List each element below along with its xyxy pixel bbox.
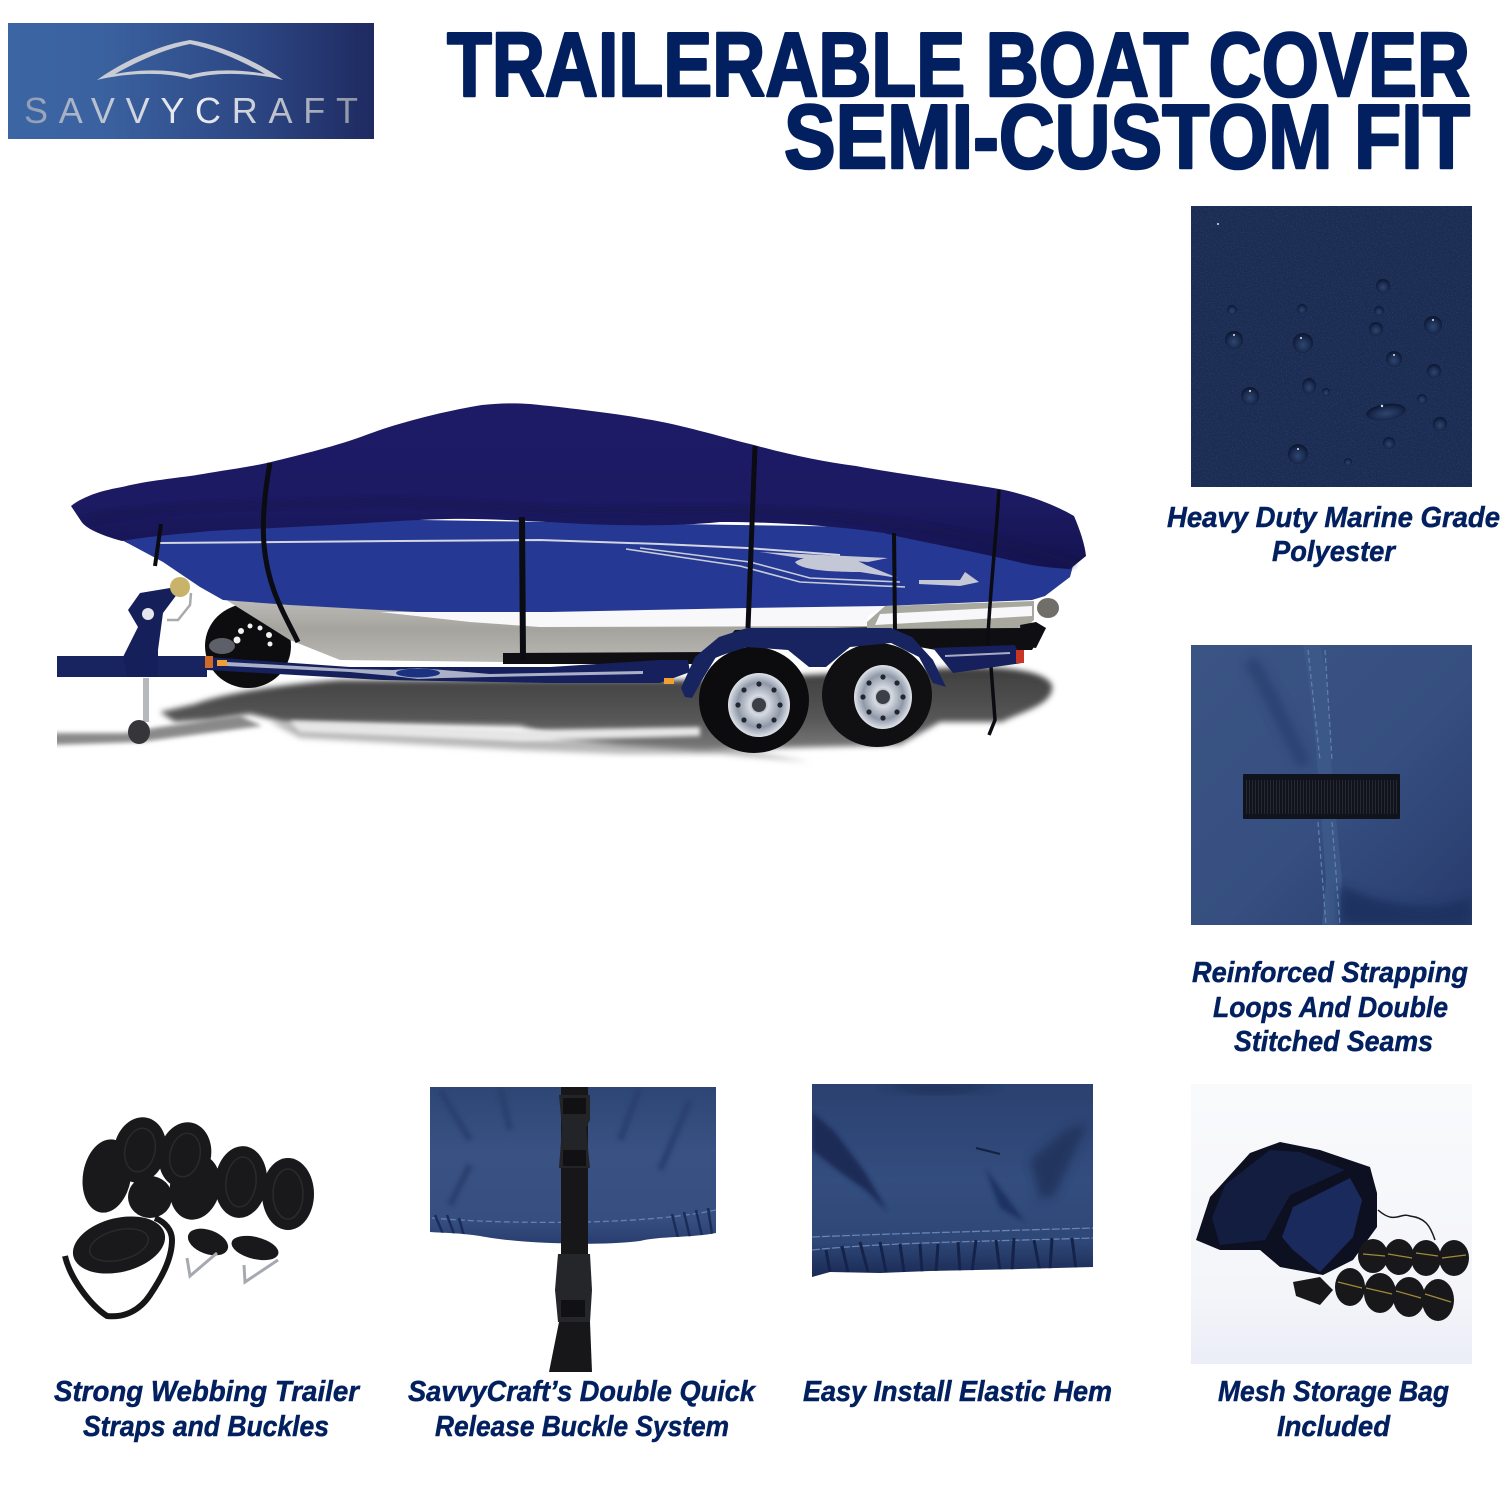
caption: strapping loops: Stitched Seams xyxy=(1234,1026,1433,1058)
cover straps xyxy=(155,446,999,735)
caption: webbing straps: Straps and Buckles xyxy=(83,1411,329,1443)
caption: buckle system xyxy=(408,1376,757,1443)
hull graphic swoosh xyxy=(160,540,979,587)
caption: elastic hem: Easy Install Elastic Hem xyxy=(803,1376,1112,1408)
swatch: reinforced strapping loop xyxy=(1191,645,1472,925)
cover fold shadow xyxy=(90,502,1075,565)
boat cover xyxy=(71,403,1086,569)
caption: buckle system: Release Buckle System xyxy=(435,1411,729,1443)
logo: SavvyCraft: SAVVYCRAFT xyxy=(24,90,358,131)
white stripe xyxy=(380,606,885,627)
mesh bag xyxy=(1196,1142,1377,1275)
swatch: marine grade polyester with water drops xyxy=(1191,206,1472,487)
buckle strap xyxy=(549,1087,592,1372)
photo: mesh storage bag xyxy=(1191,1084,1472,1364)
stuffed cover xyxy=(1282,1178,1362,1272)
caption: strapping loops: Loops And Double xyxy=(1213,992,1448,1024)
photo: webbing straps and buckles xyxy=(65,1112,314,1316)
bundled straps xyxy=(1293,1239,1469,1321)
strapping loop xyxy=(1243,774,1400,819)
caption: webbing straps xyxy=(54,1376,361,1443)
outboard motor xyxy=(1020,598,1059,648)
boat on trailer with cover xyxy=(50,403,1086,762)
caption: mesh storage bag xyxy=(1218,1376,1449,1443)
grey rear band xyxy=(867,601,1034,629)
photo: double quick release buckle xyxy=(430,1087,716,1372)
photo: elastic hem xyxy=(812,1084,1093,1277)
ground shadow xyxy=(50,667,1052,762)
trailer wheels xyxy=(822,643,932,747)
caption: marine grade polyester: Polyester xyxy=(1272,536,1397,568)
fender xyxy=(681,628,946,698)
caption: strapping loops xyxy=(1192,957,1468,1058)
blue hull xyxy=(100,515,1074,612)
jack and caster xyxy=(128,678,150,744)
caption: mesh storage bag: Included xyxy=(1277,1411,1391,1443)
lower hull grey xyxy=(223,598,880,662)
caption: marine grade polyester xyxy=(1167,502,1500,568)
hull under-rear dark xyxy=(503,624,1046,664)
caption: mesh storage bag: Mesh Storage Bag xyxy=(1218,1376,1449,1408)
title xyxy=(447,15,1470,188)
trailer frame xyxy=(205,656,690,684)
caption: buckle system: SavvyCraft’s Double Quick xyxy=(408,1376,757,1408)
caption: webbing straps: Strong Webbing Trailer xyxy=(54,1376,361,1408)
caption: strapping loops: Reinforced Strapping xyxy=(1192,957,1468,989)
trailer tongue xyxy=(57,656,207,677)
cord xyxy=(1378,1210,1435,1240)
rear trailer wheel xyxy=(205,604,291,688)
rear frame xyxy=(933,645,1024,673)
coupler and safety chain xyxy=(123,577,191,677)
logo: SavvyCraft xyxy=(8,23,374,139)
